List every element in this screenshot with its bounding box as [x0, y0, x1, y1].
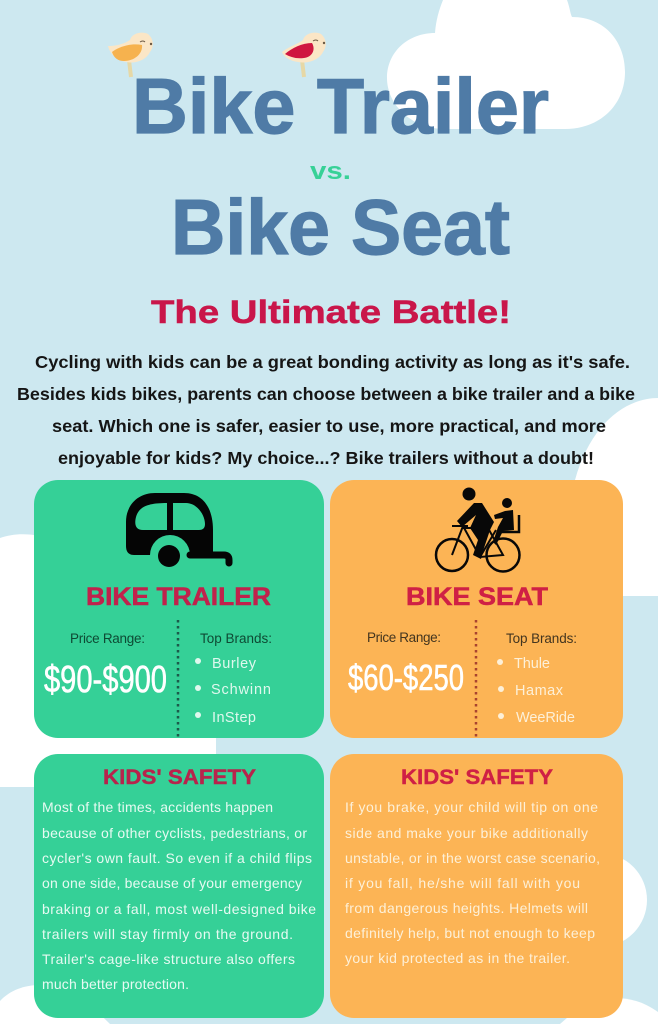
- cloud: bottom right: [560, 998, 658, 1024]
- cloud: bottom left: [0, 985, 110, 1024]
- icon: bike with child seat: [436, 488, 520, 572]
- bird: red: [282, 33, 326, 77]
- panel: bike seat: [330, 480, 623, 738]
- brands: Burley: [212, 656, 257, 672]
- body text: seat safety: If you brake, your child will tip on one: [345, 799, 598, 815]
- body text: seat safety: your kid protected as in the trailer.: [345, 950, 570, 966]
- price label: Price Range:: [367, 630, 441, 645]
- body text: trailer safety: trailers will stay firmly on the ground.: [42, 926, 293, 942]
- heading: kids safety trailer: KIDS' SAFETY: [103, 766, 256, 789]
- price label: Price Range:: [70, 631, 145, 646]
- bird: orange: [108, 33, 153, 77]
- brands: WeeRide: [516, 710, 575, 726]
- body text: seat safety: unstable, or in the worst case scenario,: [345, 850, 600, 866]
- heading: bike trailer: BIKE TRAILER: [86, 583, 271, 611]
- price value: $90-$900: [44, 659, 167, 701]
- body text: seat safety: [345, 799, 600, 966]
- brands: InStep: [212, 710, 256, 726]
- cloud: right middle: [575, 398, 658, 596]
- price value: $60-$250: [348, 657, 464, 698]
- panel: seat safety: [330, 754, 623, 1018]
- body text: trailer safety: braking or a fall, most well-designed bike: [42, 901, 316, 917]
- body text: trailer safety: on one side, because of your emergency: [42, 875, 302, 891]
- brands: Schwinn: [211, 682, 271, 698]
- intro text: Besides kids bikes, parents can choose between a bike trailer and a bike: [17, 384, 635, 404]
- intro text: enjoyable for kids? My choice...? Bike trailers without a doubt!: [58, 448, 594, 468]
- body text: trailer safety: much better protection.: [42, 976, 189, 992]
- body text: seat safety: from dangerous heights. Helmets will: [345, 900, 588, 916]
- body text: trailer safety: cycler's own fault. So even if a child flips: [42, 850, 312, 866]
- title: Bike Seat: Bike Seat: [171, 183, 510, 271]
- brands: Top Brands:: [506, 631, 577, 646]
- brands: Thule: [514, 656, 550, 672]
- brands: Hamax: [515, 683, 564, 699]
- subtitle: The Ultimate Battle!: [151, 294, 511, 330]
- body text: seat safety: if you fall, he/she will fall with you: [345, 875, 580, 891]
- intro text: Cycling with kids can be a great bonding activity as long as it's safe.: [35, 352, 630, 372]
- icon: camper trailer: [126, 493, 229, 567]
- body text: trailer safety: Trailer's cage-like structure also offers: [42, 951, 295, 967]
- panel: bike trailer: [34, 480, 324, 738]
- cloud: left middle: [0, 534, 216, 787]
- body text: trailer safety: [42, 799, 316, 992]
- body text: trailer safety: Most of the times, accidents happen: [42, 799, 273, 815]
- panel: trailer safety: [34, 754, 324, 1018]
- brands: [497, 631, 577, 726]
- intro text: [17, 352, 635, 468]
- heading: bike seat: BIKE SEAT: [406, 583, 548, 611]
- cloud: top right: [387, 0, 625, 129]
- brands: Top Brands:: [200, 631, 272, 646]
- heading: kids safety seat: KIDS' SAFETY: [401, 766, 553, 789]
- brands: [195, 631, 272, 726]
- cloud: lower right: [553, 853, 647, 947]
- intro text: seat. Which one is safer, easier to use, more practical, and more: [52, 416, 606, 436]
- title: Bike Trailer: Bike Trailer: [132, 62, 549, 150]
- body text: seat safety: side and make your bike additionally: [345, 825, 588, 841]
- title: vs.: vs.: [310, 158, 351, 185]
- body text: seat safety: definitely help, but not enough to keep: [345, 925, 595, 941]
- body text: trailer safety: because of other cyclists, pedestrians, or: [42, 825, 307, 841]
